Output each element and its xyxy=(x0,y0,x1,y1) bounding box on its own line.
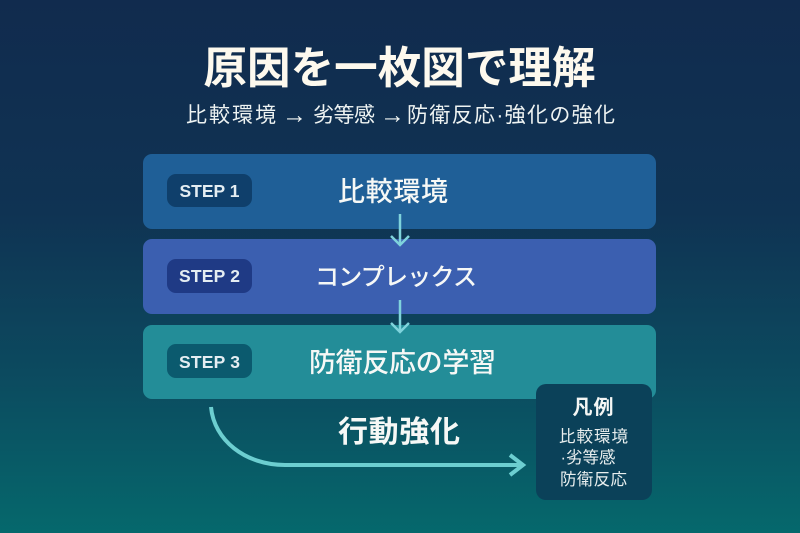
legend items: ·劣等感 xyxy=(560,448,616,467)
panel: step 2 xyxy=(143,239,656,314)
subtitle: → xyxy=(380,101,405,129)
label: 防衛反応の学習: 防衛反応の学習 xyxy=(309,348,496,378)
subtitle: 比較環境 xyxy=(186,104,276,127)
subtitle xyxy=(186,101,615,129)
arrow: behaviour reinforcement xyxy=(211,407,523,475)
badge: step 1 xyxy=(167,174,252,207)
legend title: 凡例 xyxy=(572,396,614,419)
label: 比較環境: 比較環境 xyxy=(338,177,448,207)
legend items: 防衛反応 xyxy=(560,470,628,489)
legend xyxy=(536,384,652,500)
subtitle: → xyxy=(282,101,307,129)
badge: step 2: STEP 2 xyxy=(179,266,240,286)
panel: step 1 xyxy=(143,154,656,229)
badge: step 2 xyxy=(167,259,252,293)
label: コンプレックス: コンプレックス xyxy=(315,264,477,291)
label: 行動強化: 行動強化 xyxy=(338,416,460,449)
legend items xyxy=(559,427,628,489)
badge: step 3 xyxy=(167,344,252,378)
subtitle: 防衛反応·強化の強化 xyxy=(407,104,615,127)
badge: step 1: STEP 1 xyxy=(180,181,240,201)
badge: step 3: STEP 3 xyxy=(179,352,240,372)
legend items: 比較環境 xyxy=(559,427,628,446)
arrow: step 1 to step 2 xyxy=(391,214,409,245)
arrow: step 2 to step 3 xyxy=(391,300,409,332)
subtitle: 劣等感 xyxy=(313,104,375,127)
title: 原因を一枚図で理解 xyxy=(204,44,596,93)
panel: step 3 xyxy=(143,325,656,399)
